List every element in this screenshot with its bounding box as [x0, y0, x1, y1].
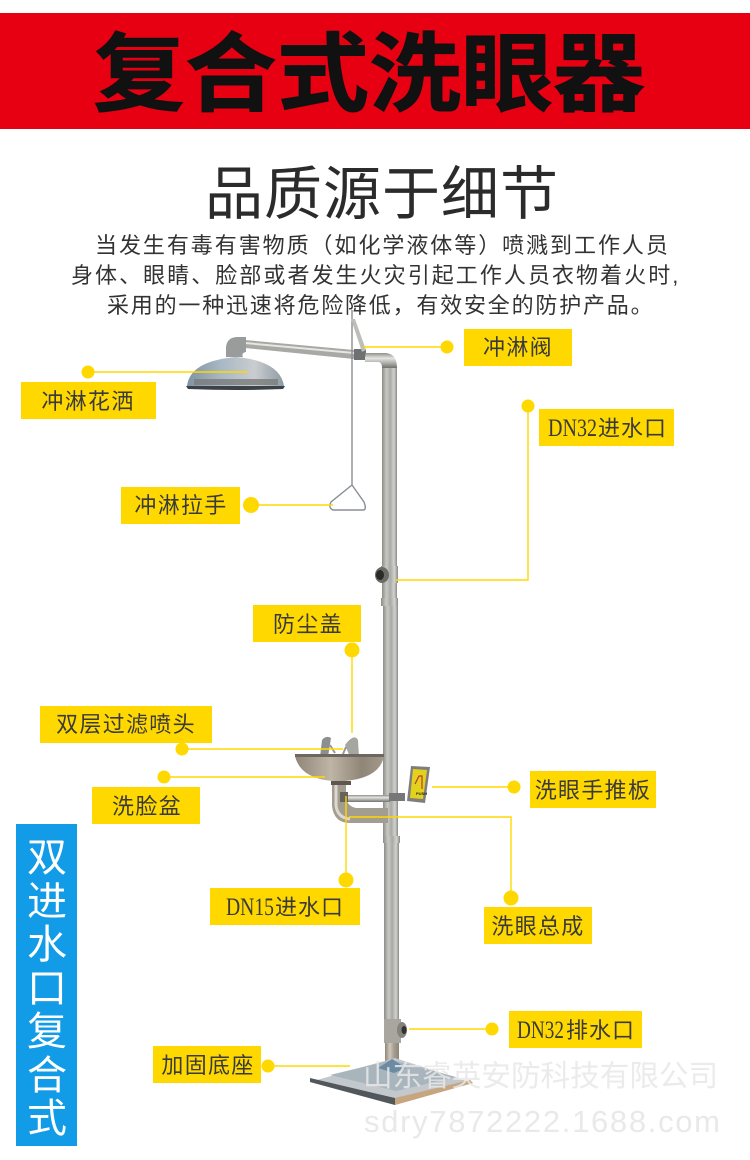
- subtitle: 品质源于细节: [205, 147, 559, 231]
- callout: dust cover: 防尘盖: [273, 612, 343, 637]
- side banner: dual inlet combination: 复: [27, 1010, 67, 1054]
- title banner: 复合式洗眼器: [93, 5, 645, 129]
- side banner: dual inlet combination: [16, 824, 77, 1146]
- callout: DN15 inlet: DN15: [226, 894, 274, 921]
- side banner: dual inlet combination: 水: [27, 923, 67, 967]
- callout: DN32 inlet: DN32: [548, 415, 597, 442]
- main pole: [382, 366, 397, 606]
- callout: shower head: 冲淋花洒: [41, 389, 135, 414]
- side banner: dual inlet combination: 双: [27, 836, 67, 880]
- watermark: site address: sdry7872222.1688.com: [364, 1104, 720, 1139]
- watermark: company name: 山东睿英安防科技有限公司: [363, 1052, 718, 1095]
- base: [310, 1058, 473, 1105]
- side banner: dual inlet combination: 口: [27, 967, 67, 1011]
- intro paragraph: [71, 233, 680, 318]
- callout: DN32 drain: DN32: [517, 1017, 564, 1044]
- intro paragraph: 当发生有毒有害物质（如化学液体等）喷溅到工作人员: [95, 233, 670, 258]
- callout: eye wash assembly: 洗眼总成: [491, 914, 585, 939]
- callout: shower valve: [363, 329, 572, 366]
- callout: DN32 drain: [409, 1011, 642, 1048]
- upper water pipe: [344, 795, 390, 802]
- shower head: [187, 357, 284, 386]
- callout: DN32 drain: 排水口: [566, 1018, 635, 1043]
- callout: DN15 inlet: 进水口: [275, 895, 344, 920]
- wash basin: [295, 756, 384, 781]
- intro paragraph: 采用的一种迅速将危险降低，有效安全的防护产品。: [107, 293, 654, 318]
- push plate: PUSH: [416, 791, 427, 796]
- eye wash nozzles: [320, 737, 331, 757]
- top tee fitting: [381, 566, 398, 583]
- callout: basin: [92, 770, 325, 824]
- eye wash station product: [186, 310, 473, 1105]
- callout: DN32 inlet: [396, 400, 674, 580]
- callout: reinforced base: [153, 1046, 350, 1083]
- callout: double filter nozzle: [40, 706, 343, 756]
- shower arm: [245, 340, 354, 359]
- callout: push plate label: 洗眼手推板: [535, 778, 651, 803]
- callout: shower head: [21, 366, 248, 419]
- callout: push plate label: [432, 771, 656, 808]
- drain trap: [332, 785, 388, 823]
- callout: basin: 洗脸盆: [112, 794, 182, 819]
- callout: DN15 inlet: [210, 796, 360, 925]
- callout: pull handle: 冲淋拉手: [134, 493, 228, 518]
- pull rod and handle: [330, 310, 365, 510]
- shower neck: [226, 337, 246, 357]
- side banner: dual inlet combination: 合: [27, 1054, 67, 1098]
- intro paragraph: 身体、眼睛、脸部或者发生火灾引起工作人员衣物着火时,: [71, 263, 680, 288]
- side banner: dual inlet combination: 式: [27, 1097, 67, 1141]
- valve lever: [351, 319, 366, 352]
- callout: double filter nozzle: 双层过滤喷头: [56, 712, 196, 737]
- callout: reinforced base: 加固底座: [161, 1053, 255, 1078]
- push plate: [407, 766, 430, 803]
- lower tee fitting: [384, 1019, 401, 1043]
- callout: DN32 inlet: 进水口: [598, 416, 667, 441]
- callout: shower valve: 冲淋阀: [483, 335, 553, 360]
- callout: dust cover: [253, 605, 361, 733]
- side banner: dual inlet combination: 进: [27, 880, 67, 924]
- callout: eye wash assembly: [349, 817, 592, 944]
- callout: pull handle: [121, 487, 333, 524]
